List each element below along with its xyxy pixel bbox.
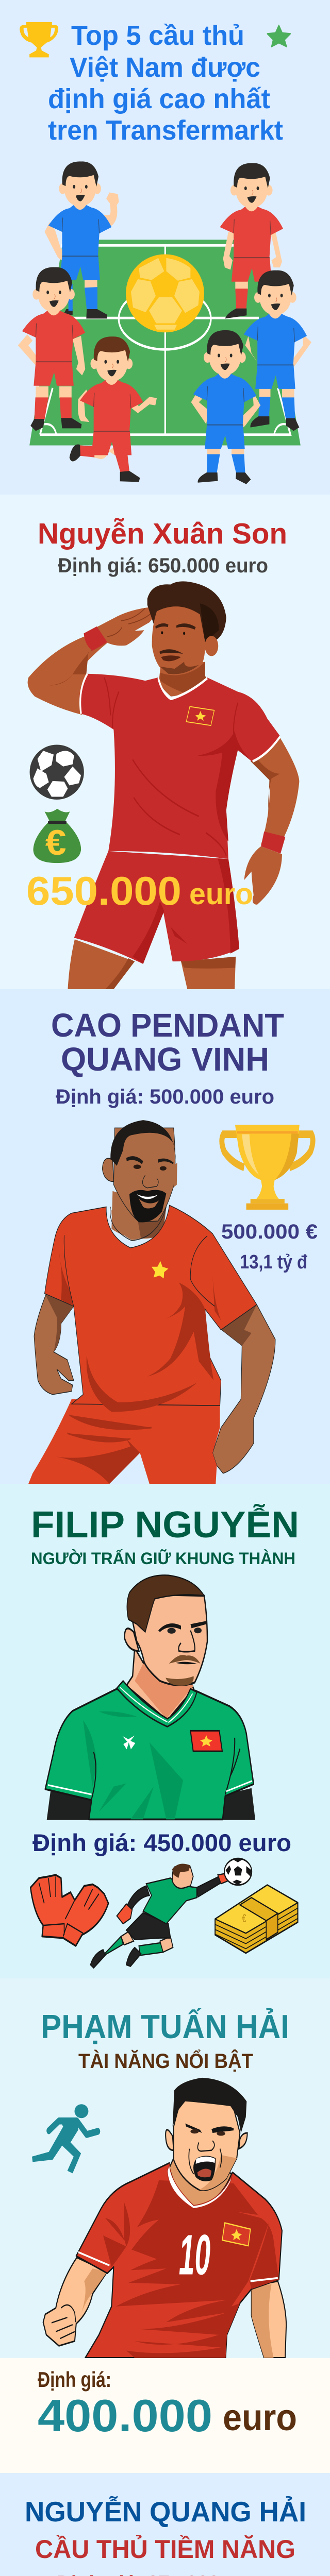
jersey flag [190, 1731, 222, 1751]
tagline: CẦU THỦ TIỀM NĂNG [35, 2534, 295, 2564]
unit: euro [223, 2397, 297, 2438]
player name: Nguyễn Xuân Son [38, 517, 287, 550]
panel: Cao Pendant Quang Vinh [0, 989, 330, 1484]
player name: CAO PENDANT [51, 1007, 284, 1044]
jersey [79, 674, 280, 859]
valuation box [0, 2358, 330, 2473]
number: 400.000 [38, 2390, 212, 2441]
player name: FILIP NGUYỄN [31, 1504, 299, 1546]
pitch [29, 240, 301, 445]
shorts [74, 851, 239, 964]
value callout: 13,1 tỷ đ [240, 1251, 308, 1273]
title: Top 5 cầu thủ [71, 20, 244, 51]
player name [51, 1007, 284, 1078]
player name: PHẠM TUẤN HẢI [41, 2008, 289, 2045]
neck [159, 662, 207, 697]
tagline: TÀI NĂNG NỔI BẬT [78, 2048, 253, 2073]
title: định giá cao nhất [48, 83, 270, 114]
label: Định giá: [38, 2367, 111, 2392]
face and hair [147, 581, 226, 643]
icon: goalkeeper gloves [30, 1875, 108, 1946]
head [170, 2158, 232, 2206]
icon: running figure [32, 2104, 98, 2173]
illustration: shouting player in number 10 shirt: 10 [179, 2223, 210, 2286]
neck and head [111, 1191, 166, 1239]
panel: Filip Nguyễn [0, 1484, 330, 1978]
icon: stack of euro banknotes: € [242, 1912, 246, 1925]
icon: golden ball [126, 254, 204, 332]
icon: stack of euro banknotes [215, 1885, 298, 1953]
jersey flag [186, 706, 214, 725]
big value: 650.000 euro: 650.000 [26, 868, 182, 913]
illustration: saluting player [28, 581, 299, 989]
player name: NGUYỄN QUANG HẢI [25, 2496, 306, 2528]
illustration: player in red shirt [28, 1120, 275, 1484]
illustration: shouting player in number 10 shirt [43, 2078, 286, 2358]
shorts [28, 1399, 220, 1484]
title: Việt Nam được [70, 52, 260, 83]
icon: gold trophy [20, 22, 58, 57]
icon: football [30, 745, 84, 800]
panel: Nguyễn Quang Hải [0, 2473, 330, 2576]
player: blue, right [244, 270, 311, 431]
big value: 650.000 euro [26, 868, 253, 913]
jersey flag [222, 2223, 251, 2246]
panel: Phạm Tuấn Hải [0, 1978, 330, 2473]
icon: green star [267, 25, 290, 47]
illustration: goalkeeper portrait [45, 1575, 255, 1820]
panel: header [0, 0, 330, 495]
title: tren Transfermarkt [48, 115, 283, 146]
icon: diving goalkeeper [91, 1858, 252, 1968]
title [48, 20, 283, 146]
jersey logo [123, 1736, 135, 1750]
role subtitle: NGƯỜI TRẤN GIỮ KHUNG THÀNH [31, 1549, 295, 1568]
icon: euro money bag [33, 809, 81, 863]
big value: 650.000 euro: euro [189, 877, 253, 911]
panel: Nguyễn Xuân Son [0, 495, 330, 989]
player: red, running [70, 336, 157, 482]
value callout: 500.000 € [221, 1221, 318, 1243]
jersey [76, 2163, 282, 2358]
valuation subtitle: Định giá: 500.000 euro [56, 1086, 274, 1108]
player: blue, front [191, 330, 260, 484]
value callout [221, 1221, 318, 1273]
valuation subtitle: Định giá: 650.000 euro [58, 554, 268, 577]
player: red, top right [220, 163, 283, 318]
player: blue, top left [45, 161, 119, 318]
valuation: Định giá: 450.000 euro [32, 1829, 291, 1856]
icon: euro money bag: € [45, 823, 67, 862]
player name: QUANG VINH [61, 1041, 269, 1078]
player: red, left [18, 267, 85, 431]
illustration: football pitch with six players [18, 161, 311, 484]
icon: gold trophy [222, 1125, 313, 1210]
